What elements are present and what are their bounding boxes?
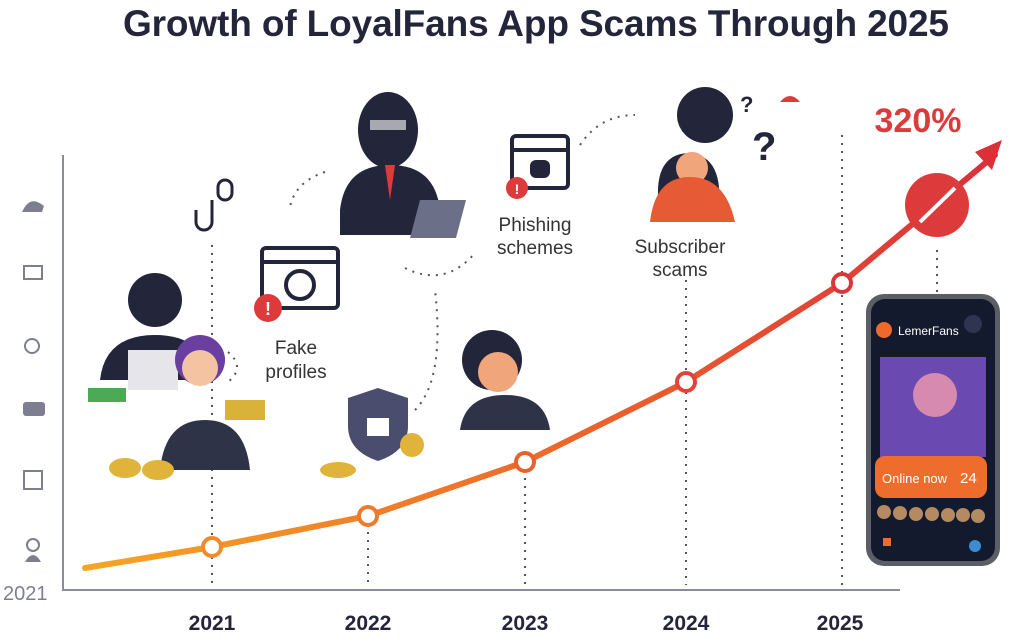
illustration: subscriber scam person — [650, 87, 800, 222]
text: phishing schemes: Phishing — [499, 215, 571, 236]
x labels: 2022 — [345, 612, 391, 635]
y-axis icons — [22, 201, 45, 562]
illustration: scammer with money 2021 — [88, 273, 265, 480]
text: subscriber scams: Subscriber — [635, 237, 725, 258]
illustration: fake profile window: ! — [265, 299, 271, 319]
text: subscriber scams: scams — [653, 260, 707, 281]
title: Growth of LoyalFans App Scams Through 2025 — [123, 3, 949, 44]
icon: phishing window — [506, 136, 568, 199]
text: fake profiles: Fake — [275, 338, 317, 359]
phone mockup — [866, 294, 1000, 566]
illustration: woman thinking — [460, 330, 550, 430]
y-axis label: 2021 — [3, 583, 48, 605]
x labels — [189, 612, 864, 635]
icon: hook — [196, 180, 232, 230]
illustration: subscriber scam person: ? — [740, 92, 753, 117]
illustration: subscriber scam person: ? — [752, 125, 776, 169]
callout 320%: 320% — [875, 102, 961, 140]
phone mockup: 24 — [960, 470, 977, 487]
illustration: hacker with laptop — [340, 92, 466, 238]
text: fake profiles: profiles — [265, 362, 327, 383]
icon: phishing window: ! — [515, 181, 519, 197]
x labels: 2021 — [189, 612, 236, 635]
x labels: 2023 — [502, 612, 548, 635]
axes — [63, 155, 900, 590]
dotted guides — [212, 115, 937, 585]
x labels: 2025 — [817, 612, 864, 635]
text: phishing schemes: schemes — [497, 238, 573, 259]
growth line — [85, 140, 1002, 568]
illustration: shield lock — [320, 388, 424, 478]
illustration: fake profile window — [254, 248, 338, 322]
x labels: 2024 — [663, 612, 710, 635]
phone mockup: LemerFans — [898, 324, 959, 338]
phone mockup: Online now — [882, 471, 948, 486]
